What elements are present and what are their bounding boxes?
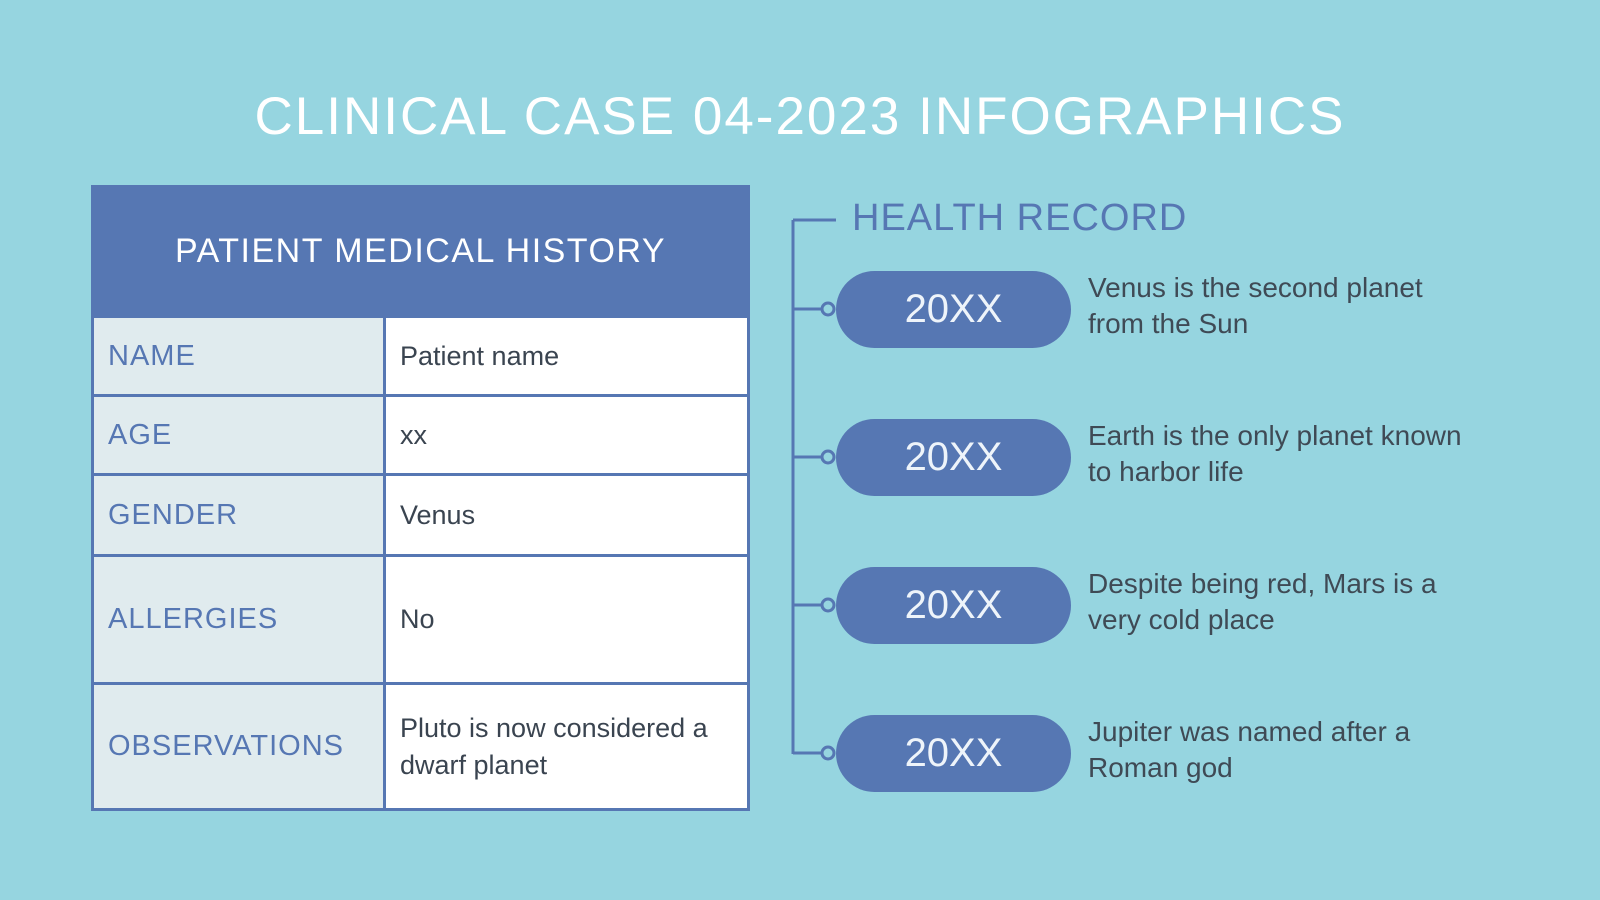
row: age: xx [400, 420, 427, 450]
row: allergies [94, 554, 747, 682]
table header [94, 188, 747, 315]
row: gender: GENDER [108, 498, 238, 530]
pill 2: 20XX [905, 435, 1002, 479]
pill 4 [836, 715, 1071, 792]
text 3: Despite being red, Mars is a [1088, 568, 1437, 599]
title: CLINICAL CASE 04-2023 INFOGRAPHICS [254, 87, 1346, 146]
text 2: to harbor life [1088, 456, 1244, 487]
row: name: NAME [108, 340, 196, 372]
text 1: Venus is the second planet [1088, 272, 1423, 303]
pill 1 [836, 271, 1071, 348]
table header: PATIENT MEDICAL HISTORY [175, 232, 666, 270]
row: allergies: No [400, 604, 435, 634]
row: allergies: ALLERGIES [108, 603, 278, 635]
text 4 [1088, 716, 1410, 783]
text 4: Roman god [1088, 752, 1233, 783]
pill 3 [836, 567, 1071, 644]
row: observations: OBSERVATIONS [108, 730, 344, 762]
row: age [94, 394, 747, 473]
row: name [94, 315, 747, 394]
text 3: very cold place [1088, 604, 1275, 635]
row: name: Patient name [400, 340, 559, 370]
row: gender [94, 473, 747, 554]
text 2: Earth is the only planet known [1088, 420, 1462, 451]
text 4: Jupiter was named after a [1088, 716, 1410, 747]
row: gender: Venus [400, 500, 475, 530]
row: observations: Pluto is now considered a dwarf planet [400, 712, 708, 780]
text 1: from the Sun [1088, 308, 1248, 339]
text 1 [1088, 272, 1423, 339]
text 3 [1088, 568, 1437, 635]
pill 4: 20XX [905, 731, 1002, 775]
row: observations [94, 682, 747, 808]
pill 2 [836, 419, 1071, 496]
heading: health record: HEALTH RECORD [852, 197, 1187, 239]
pill 3: 20XX [905, 583, 1002, 627]
panel: patient medical history table [91, 185, 750, 811]
pill 1: 20XX [905, 287, 1002, 331]
row: age: AGE [108, 418, 172, 450]
text 2 [1088, 420, 1462, 487]
